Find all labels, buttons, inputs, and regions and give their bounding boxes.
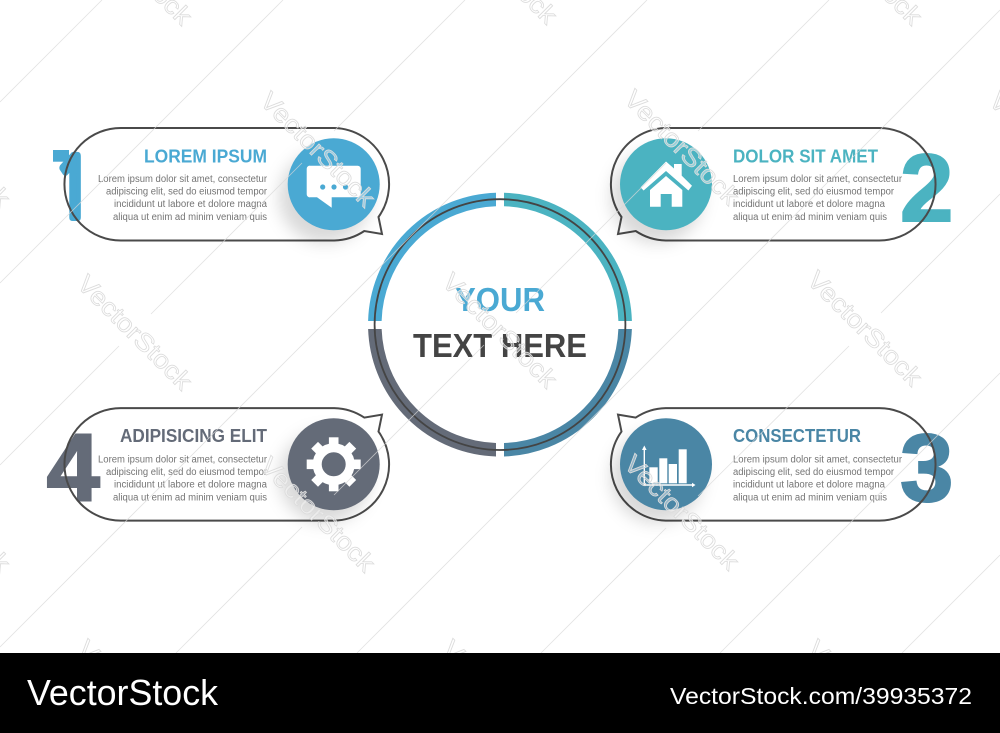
body text 2: aliqua ut enim ad minim veniam quis — [733, 212, 887, 223]
icon: bar chart — [642, 446, 696, 487]
heading 4: ADIPISICING ELIT — [120, 426, 267, 446]
numeral 3: 3 — [900, 415, 953, 522]
body text 3: aliqua ut enim ad minim veniam quis — [733, 492, 887, 503]
body text 3: adipiscing elit, sed do eiusmod tempor — [733, 467, 895, 478]
icon circle 4 — [288, 418, 380, 510]
watermark text: VectorStock — [436, 268, 563, 394]
icon circle 3 — [620, 418, 712, 510]
watermark text: VectorStock — [618, 450, 745, 576]
bubble outline 2 — [611, 128, 936, 240]
body text 4 — [98, 454, 268, 503]
heading 3: CONSECTETUR — [733, 426, 861, 446]
circle shadow 1 — [279, 151, 371, 243]
central title: YOUR — [455, 281, 545, 318]
body text 1: incididunt ut labore et dolore magna — [114, 199, 268, 210]
icon circle 2 — [620, 138, 712, 230]
body text 2 — [733, 174, 903, 223]
body text 4: aliqua ut enim ad minim veniam quis — [113, 492, 267, 503]
bubble outline 1 — [64, 128, 389, 240]
footer bar — [0, 653, 1000, 733]
body text 4: adipiscing elit, sed do eiusmod tempor — [106, 467, 268, 478]
heading 2: DOLOR SIT AMET — [733, 146, 878, 166]
body text 1 — [98, 174, 268, 223]
numeral 4: 4 — [46, 414, 100, 522]
body text 2: adipiscing elit, sed do eiusmod tempor — [733, 187, 895, 198]
footer logo: VectorStock — [27, 672, 219, 713]
bubble outline 4 — [64, 408, 389, 521]
body text 2: Lorem ipsum dolor sit amet, consectetur — [733, 174, 903, 185]
icon circle 1 — [288, 138, 380, 230]
panel 2: dolor sit amet — [611, 128, 953, 243]
panel 4: adipisicing elit — [46, 408, 389, 523]
icon: house — [641, 162, 692, 207]
circle shadow 4 — [279, 431, 371, 523]
body text 3 — [733, 454, 903, 503]
body text 4: Lorem ipsum dolor sit amet, consectetur — [98, 454, 268, 466]
central title: TEXT HERE — [413, 327, 587, 364]
panel 1: lorem ipsum — [52, 128, 389, 243]
body text 2: incididunt ut labore et dolore magna — [733, 199, 886, 210]
numeral 1: 1 — [52, 148, 94, 232]
central ring — [375, 199, 625, 450]
body text 1: Lorem ipsum dolor sit amet, consectetur — [98, 174, 268, 185]
watermark text: VectorStock — [254, 87, 381, 213]
circle shadow 2 — [611, 151, 703, 243]
body text 1: adipiscing elit, sed do eiusmod tempor — [106, 187, 268, 198]
watermark text: VectorStock — [618, 85, 745, 211]
heading 1: LOREM IPSUM — [144, 146, 267, 166]
central title — [413, 281, 587, 364]
watermark text: VectorStock — [254, 452, 381, 578]
body text 1: aliqua ut enim ad minim veniam quis — [113, 212, 267, 223]
body text 3: Lorem ipsum dolor sit amet, consectetur — [733, 454, 903, 466]
bubble outline 3 — [611, 408, 936, 521]
watermark text: VectorStock — [71, 270, 198, 396]
panel 3: consectetur — [611, 408, 953, 523]
body text 3: incididunt ut labore et dolore magna — [733, 480, 886, 491]
body text 4: incididunt ut labore et dolore magna — [114, 480, 268, 491]
watermark text: VectorStock — [801, 266, 928, 392]
footer url: VectorStock.com/39935372 — [670, 683, 972, 709]
numeral 2: 2 — [900, 135, 953, 242]
icon: gear — [307, 437, 361, 491]
icon: speech bubble — [307, 166, 361, 208]
circle shadow 3 — [611, 431, 703, 523]
